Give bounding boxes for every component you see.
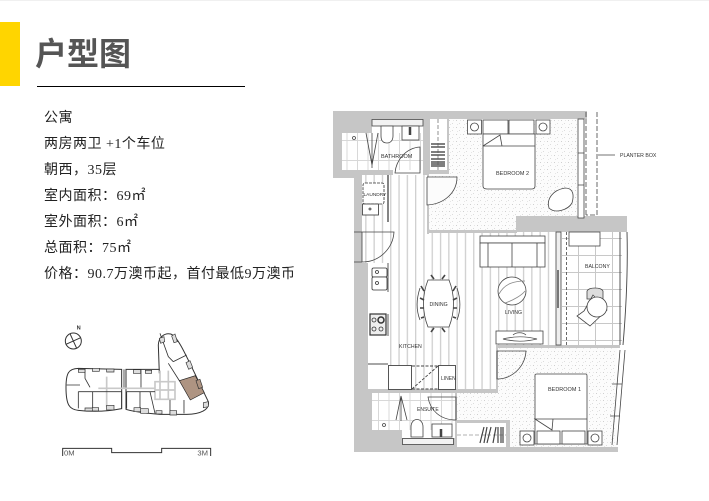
top strip xyxy=(0,0,709,1)
dining table and chairs: DINING xyxy=(430,302,448,308)
door: bedroom 2 xyxy=(427,177,457,205)
living floor stripes xyxy=(362,175,556,389)
scale bar xyxy=(63,448,211,458)
highlighted apartment xyxy=(179,376,204,400)
property details text: 总面积：75㎡ xyxy=(44,241,132,256)
scale bar: 3M xyxy=(197,449,208,458)
kitchen floor xyxy=(368,263,388,389)
balcony glazing xyxy=(620,232,627,345)
property details text: 室外面积：6㎡ xyxy=(44,215,138,230)
linen and storage: LINEN xyxy=(441,376,456,382)
dining table and chairs xyxy=(417,275,460,332)
door: entry xyxy=(354,232,394,262)
door: bedroom 1 xyxy=(497,351,526,379)
walls xyxy=(333,111,627,452)
bedroom 2 window and planter box: PLANTER BOX xyxy=(620,153,657,159)
laundry xyxy=(362,175,388,222)
core and corridor xyxy=(98,371,175,407)
unit partitions xyxy=(67,333,187,414)
balcony tiles xyxy=(562,232,622,345)
bedroom 2 window and planter box xyxy=(578,112,657,218)
linen and storage xyxy=(388,366,456,390)
sliding door xyxy=(556,232,566,345)
title: 户型图 xyxy=(35,36,131,72)
bedroom 1 furniture xyxy=(520,374,602,445)
kitchen xyxy=(368,263,388,364)
label: living: LIVING xyxy=(505,310,522,316)
label: bathroom: BATHROOM xyxy=(381,154,413,160)
bedroom 1 floor xyxy=(457,348,617,447)
balcony furniture: BALCONY xyxy=(585,264,610,270)
yellow accent bar xyxy=(0,22,20,86)
living sofa xyxy=(480,236,545,267)
label: bedroom 2: BEDROOM 2 xyxy=(496,171,529,177)
wardrobe: bedroom 2 xyxy=(430,119,447,170)
bedroom 2 floor xyxy=(429,119,579,230)
ensuite fixtures xyxy=(382,396,456,444)
media unit xyxy=(496,331,543,344)
property details text: 价格：90.7万澳币起，首付最低9万澳币 xyxy=(44,267,296,282)
icon: compass xyxy=(65,325,81,349)
scale bar: 0M xyxy=(64,449,75,458)
title underline xyxy=(37,86,245,87)
bathroom fixtures xyxy=(352,120,423,173)
bathroom tiles xyxy=(342,133,423,170)
wardrobe: bedroom 1 xyxy=(457,423,506,447)
laundry: LAUNDRY xyxy=(364,192,387,198)
property details text: 两房两卫 +1个车位 xyxy=(44,137,165,152)
building outline xyxy=(66,368,122,411)
label: kitchen: KITCHEN xyxy=(399,344,422,350)
living round table xyxy=(498,277,526,305)
bedroom 1 window xyxy=(610,350,625,445)
property details text: 公寓 xyxy=(44,111,73,126)
ensuite tiles xyxy=(372,393,455,430)
balcony furniture xyxy=(569,232,610,326)
property details text xyxy=(44,110,296,282)
property details text: 朝西，35层 xyxy=(44,163,117,178)
property details text: 室内面积：69㎡ xyxy=(44,189,146,204)
icon: compass: N xyxy=(77,325,81,331)
ensuite fixtures: ENSUITE xyxy=(417,407,439,413)
label: bedroom 1: BEDROOM 1 xyxy=(548,387,581,393)
bedroom 2 furniture xyxy=(468,120,573,211)
